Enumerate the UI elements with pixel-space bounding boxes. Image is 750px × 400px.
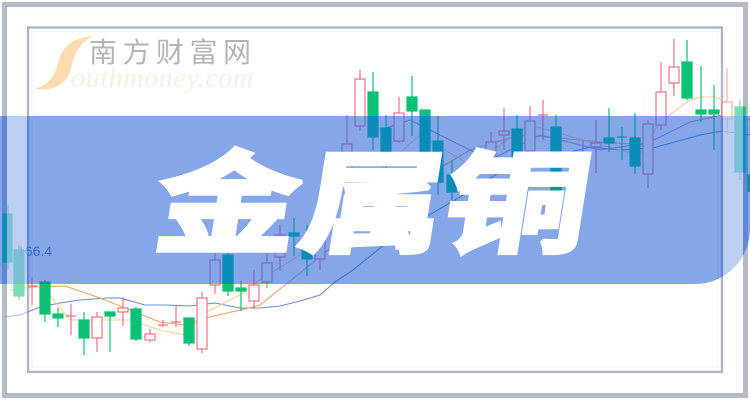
title glyph 1: 金 <box>147 144 310 267</box>
logo chinese name: 南方财富网 <box>89 37 257 68</box>
moving average lines <box>5 97 750 335</box>
candlestick chart <box>3 39 750 355</box>
title glyph 3: 铜 <box>436 144 599 267</box>
title <box>147 144 599 267</box>
candles <box>7 205 9 270</box>
inner frame <box>28 28 722 372</box>
title glyph 2: 属 <box>292 144 455 267</box>
axis price label: 166.4 <box>17 243 52 259</box>
watermark: southmoney logo <box>35 36 257 94</box>
logo domain: outhmoney.com <box>71 63 254 94</box>
blue title band <box>0 116 750 284</box>
logo swoosh S <box>35 36 93 90</box>
